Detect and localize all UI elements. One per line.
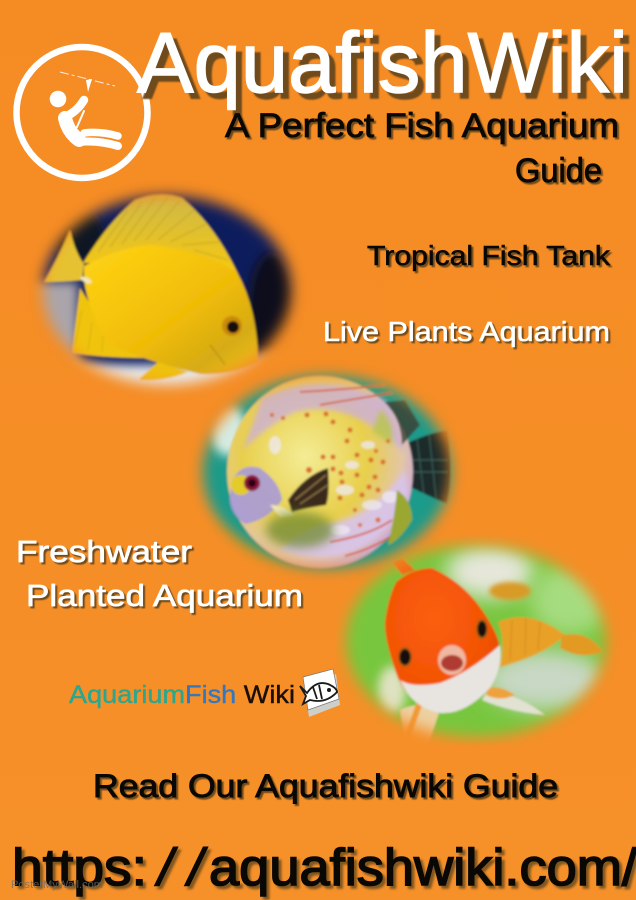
title: AquafishWiki xyxy=(137,16,628,111)
eye xyxy=(222,316,242,336)
text: Freshwater Planted Aquarium: Planted Aquarium xyxy=(26,578,303,613)
subtitle xyxy=(225,107,619,190)
head xyxy=(230,467,282,524)
watermark: PosterMyWall.com xyxy=(11,879,103,891)
text: Freshwater Planted Aquarium: Freshwater xyxy=(16,534,192,569)
logo: AquariumFish Wiki: Aquarium Fish Wiki xyxy=(69,681,295,709)
subtitle: A Perfect Fish Aquarium xyxy=(225,107,619,145)
text: Live Plants Aquarium: Live Plants Aquarium xyxy=(323,316,610,347)
pectoral fin xyxy=(498,617,565,667)
website url: https: xyxy=(12,839,147,897)
website url: / xyxy=(182,839,210,897)
subtitle: Guide xyxy=(515,152,602,190)
photo: discus fish xyxy=(192,364,462,580)
photo: yellow tang fish xyxy=(32,184,302,396)
body xyxy=(383,566,501,692)
text: Freshwater Planted Aquarium xyxy=(16,534,303,613)
eyes xyxy=(398,647,412,667)
website url xyxy=(12,839,636,897)
website url: / xyxy=(152,839,180,897)
body xyxy=(227,376,413,568)
call to action: Read Our Aquafishwiki Guide xyxy=(93,768,558,804)
website url: aquafishwiki.com/ xyxy=(209,839,636,897)
dorsal fin xyxy=(83,194,238,274)
text: Tropical Fish Tank: Tropical Fish Tank xyxy=(367,240,611,271)
mouth xyxy=(438,645,466,675)
photo: orange goldfish xyxy=(335,535,620,745)
icon: fish book xyxy=(300,669,340,717)
pectoral fin xyxy=(288,468,329,512)
body xyxy=(84,245,258,374)
tail xyxy=(44,230,84,282)
eye xyxy=(244,475,260,491)
tail xyxy=(408,430,452,504)
icon: zipline logo badge xyxy=(16,47,148,178)
logo: AquariumFish Wiki xyxy=(69,669,340,717)
anal fin xyxy=(72,288,145,358)
